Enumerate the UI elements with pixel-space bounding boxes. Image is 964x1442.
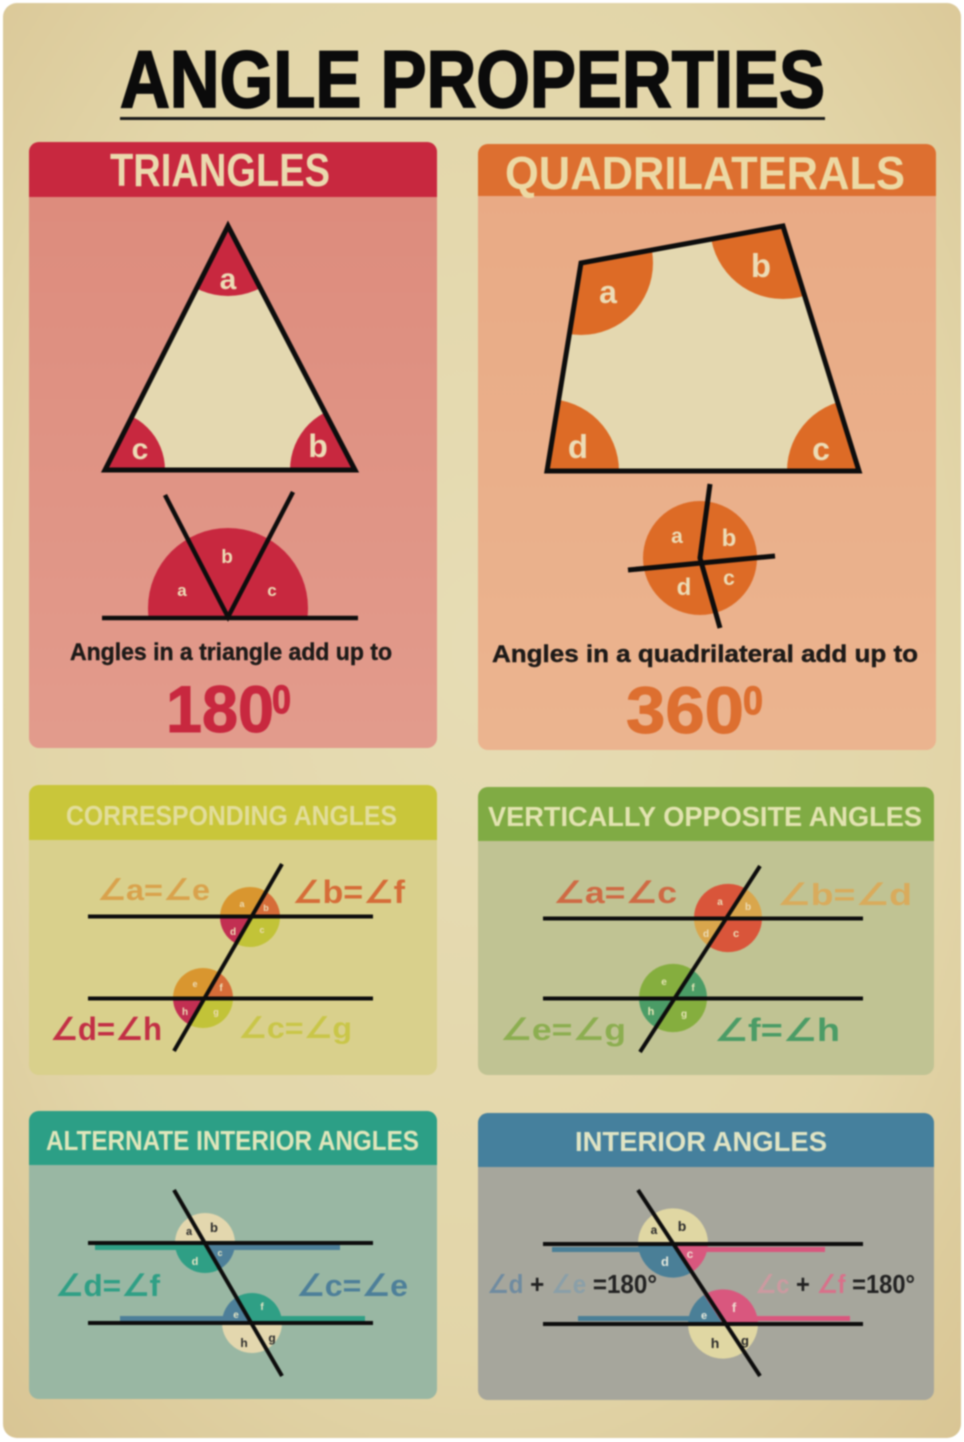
diagram: angles on a straight line xyxy=(101,490,359,622)
diagram: parallel lines with alternate interior angles: d xyxy=(192,1256,198,1268)
equation: e equals g: ∠e=∠g xyxy=(500,1012,626,1047)
header: vertically opposite angles xyxy=(478,787,934,841)
diagram: quadrilateral with angles a b c d: b xyxy=(751,247,771,284)
equation: b equals d: ∠b=∠d xyxy=(777,877,912,912)
diagram: parallel lines with interior angles: f xyxy=(732,1300,737,1315)
diagram: parallel lines with corresponding angles: d xyxy=(230,927,236,938)
diagram: parallel lines with vertically opposite angles: a xyxy=(717,897,723,908)
header: triangles xyxy=(29,142,437,197)
diagram: parallel lines with alternate interior angles: a xyxy=(186,1226,193,1238)
diagram: parallel lines with vertically opposite angles xyxy=(543,866,863,1052)
diagram: parallel lines with corresponding angles: g xyxy=(213,1007,219,1017)
diagram: parallel lines with interior angles: h xyxy=(711,1335,719,1351)
diagram: parallel lines with corresponding angles: e xyxy=(192,979,198,989)
panel: corresponding angles xyxy=(29,785,437,1075)
diagram: parallel lines with vertically opposite angles: h xyxy=(648,1006,655,1018)
equation: a equals c: ∠a=∠c xyxy=(553,875,677,910)
diagram: parallel lines with vertically opposite angles: b xyxy=(745,902,751,913)
diagram: triangle with angles a b c: c xyxy=(132,433,148,466)
diagram: parallel lines with vertically opposite angles: g xyxy=(681,1009,687,1020)
caption: triangle rule: Angles in a triangle add up to xyxy=(70,639,392,666)
equation: f equals h: ∠f=∠h xyxy=(714,1012,840,1048)
diagram: parallel lines with alternate interior angles: c xyxy=(217,1248,223,1258)
caption: quadrilateral rule: Angles in a quadrilateral add up to xyxy=(492,641,918,668)
equation: d plus e equals 180: ∠d + ∠e =180° xyxy=(487,1269,657,1299)
diagram: parallel lines with corresponding angles: h xyxy=(182,1007,188,1018)
diagram: quadrilateral with angles a b c d: d xyxy=(568,428,588,465)
value: 180 degrees: 0 xyxy=(272,678,291,722)
diagram: parallel lines with alternate interior angles: f xyxy=(260,1302,264,1313)
diagram: parallel lines with interior angles: c xyxy=(687,1247,694,1261)
equation: b equals f: ∠b=∠f xyxy=(292,874,405,910)
diagram: parallel lines with interior angles xyxy=(543,1190,863,1376)
header: corresponding angles: CORRESPONDING ANGLES xyxy=(66,800,397,831)
diagram: parallel lines with interior angles: g xyxy=(741,1333,749,1348)
panel: quadrilaterals xyxy=(475,144,936,750)
equation: c plus f equals 180: ∠c + ∠f =180° xyxy=(755,1269,915,1299)
header: triangles: TRIANGLES xyxy=(110,144,330,196)
diagram: quadrilateral with angles a b c d: a xyxy=(599,274,617,310)
header: interior angles: INTERIOR ANGLES xyxy=(575,1126,827,1157)
diagram: parallel lines with vertically opposite angles: c xyxy=(733,928,739,940)
equation: a equals e: ∠a=∠e xyxy=(97,874,210,907)
diagram: angles around a point: c xyxy=(723,567,735,590)
panel: alternate interior angles xyxy=(29,1111,437,1399)
value: 180 degrees: 180 xyxy=(166,672,274,746)
header: vertically opposite angles: VERTICALLY OPPOSITE ANGLES xyxy=(488,801,922,832)
diagram: parallel lines with vertically opposite angles: f xyxy=(691,983,695,994)
diagram: angles on a straight line: c xyxy=(267,581,277,600)
diagram: angles on a straight line: a xyxy=(177,581,187,600)
diagram: triangle with angles a b c xyxy=(100,220,360,474)
header: alternate interior angles xyxy=(29,1111,437,1165)
diagram: triangle with angles a b c: b xyxy=(308,428,328,464)
equation: d equals f: ∠d=∠f xyxy=(55,1268,161,1303)
diagram: angles around a point: a xyxy=(671,525,683,548)
value: 360 degrees: 0 xyxy=(743,679,763,723)
diagram: angles around a point xyxy=(628,484,775,628)
diagram: parallel lines with alternate interior angles: g xyxy=(268,1331,276,1345)
diagram: parallel lines with interior angles: d xyxy=(661,1254,669,1269)
panel: triangles xyxy=(29,142,437,748)
header: corresponding angles xyxy=(29,785,437,840)
diagram: angles on a straight line: b xyxy=(221,547,233,568)
diagram: parallel lines with interior angles: a xyxy=(651,1223,658,1237)
diagram: quadrilateral with angles a b c d xyxy=(543,222,864,474)
diagram: angles around a point: d xyxy=(677,574,691,601)
panel: interior angles xyxy=(478,1113,934,1400)
diagram: parallel lines with alternate interior angles: h xyxy=(240,1336,248,1350)
diagram: quadrilateral with angles a b c d: c xyxy=(812,431,830,467)
diagram: parallel lines with corresponding angles: c xyxy=(259,925,265,935)
equation: c equals e: ∠c=∠e xyxy=(296,1268,408,1303)
diagram: parallel lines with corresponding angles xyxy=(88,864,373,1051)
header: quadrilaterals: QUADRILATERALS xyxy=(505,147,905,199)
equation: c equals g: ∠c=∠g xyxy=(238,1012,352,1045)
diagram: parallel lines with interior angles: b xyxy=(678,1218,686,1234)
diagram: parallel lines with corresponding angles: a xyxy=(239,899,245,909)
diagram: parallel lines with alternate interior angles: e xyxy=(233,1310,239,1321)
diagram: angles around a point: b xyxy=(722,525,736,552)
title: ANGLE PROPERTIES xyxy=(120,35,825,125)
diagram: parallel lines with alternate interior angles: b xyxy=(210,1220,218,1235)
diagram: triangle with angles a b c: a xyxy=(220,263,237,296)
diagram: parallel lines with corresponding angles: f xyxy=(219,983,223,994)
diagram: parallel lines with alternate interior angles xyxy=(88,1190,373,1376)
header: interior angles xyxy=(478,1113,934,1167)
diagram: parallel lines with vertically opposite angles: e xyxy=(661,977,667,988)
value: 360 degrees: 360 xyxy=(626,673,744,747)
header: alternate interior angles: ALTERNATE INTERIOR ANGLES xyxy=(46,1125,419,1156)
diagram: parallel lines with corresponding angles: b xyxy=(263,903,269,913)
panel: vertically opposite angles xyxy=(478,787,934,1075)
diagram: parallel lines with vertically opposite angles: d xyxy=(703,929,709,940)
diagram: parallel lines with interior angles: e xyxy=(701,1310,707,1322)
equation: d equals h: ∠d=∠h xyxy=(50,1011,162,1047)
